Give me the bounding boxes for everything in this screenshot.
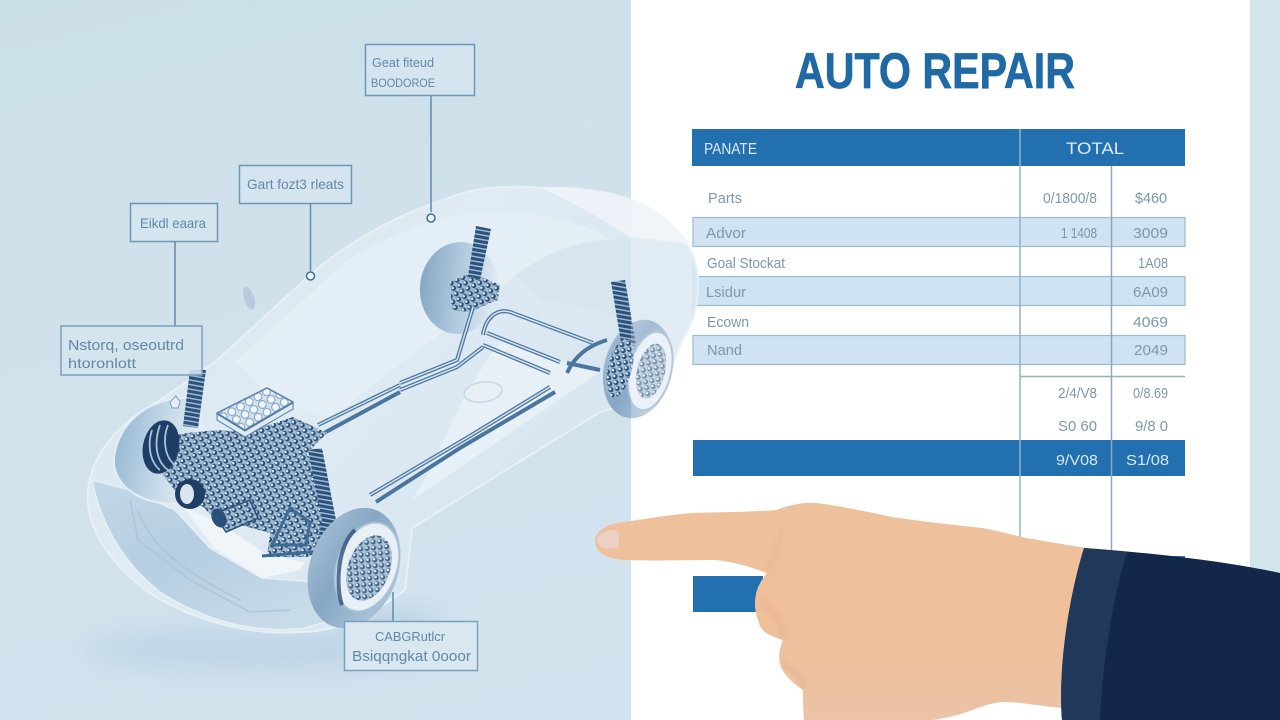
rows text: 6A09 [1133, 284, 1168, 301]
rows text [706, 190, 1168, 435]
callout: top: Geat fiteud [372, 55, 434, 70]
front left brake disc [138, 417, 184, 477]
under-engine highlight [182, 505, 305, 578]
front fender arch [114, 398, 210, 504]
column divider [1110, 166, 1112, 556]
rear right spring [611, 280, 636, 348]
brake mesh [450, 272, 500, 312]
callout: middle [240, 166, 352, 280]
invoice panel [631, 0, 1250, 720]
rows text: $460 [1135, 190, 1167, 207]
rows text: 0/8.69 [1133, 385, 1168, 402]
hand pointing [595, 503, 1280, 720]
fingernail [597, 530, 619, 549]
finger shadow [767, 525, 783, 573]
right coil spring [308, 448, 336, 552]
front bumper [92, 480, 340, 630]
engine block [150, 417, 333, 557]
rear right hub knot [601, 336, 639, 400]
door handle [463, 379, 503, 405]
table header [692, 129, 1185, 166]
summary rule [1020, 376, 1185, 378]
pulley centre [180, 484, 194, 504]
total values: 9/V08 [1056, 452, 1098, 469]
engine cover edge [217, 403, 293, 437]
rear window [515, 239, 691, 330]
rows text: Parts [708, 190, 742, 207]
car shadow [80, 628, 440, 672]
side floor panel [412, 342, 600, 500]
roof panels [235, 212, 612, 420]
engine top cover [217, 388, 293, 430]
callout: top [366, 44, 474, 222]
small bracket [170, 396, 180, 408]
callout: engine: Nstorq, oseoutrd [68, 337, 184, 354]
rows text: Advor [706, 225, 746, 242]
rows text: 1 1408 [1061, 225, 1097, 242]
callout: engine [61, 326, 202, 375]
grand total bar [693, 576, 763, 612]
title: AUTO REPAIR [795, 43, 1075, 99]
car illustration [80, 180, 698, 672]
callout: middle: Gart fozt3 rleats [247, 176, 344, 192]
sleeve [1061, 548, 1280, 720]
table [692, 129, 1185, 612]
rear left spring [468, 226, 491, 280]
lower suspension frame [262, 508, 325, 560]
callout: wheel: Bsiqqngkat 0ooor [352, 648, 471, 665]
callout: left [130, 204, 218, 326]
rows text: 3009 [1133, 225, 1168, 242]
rows text: Goal Stockat [707, 255, 786, 272]
right margin strip [1250, 0, 1280, 720]
total bar [693, 440, 1185, 476]
wheel inner crescent [338, 530, 355, 605]
callout: left: Eikdl eaara [140, 215, 206, 231]
rows text: 4069 [1133, 314, 1168, 331]
rows text: 2049 [1134, 342, 1168, 359]
header label left: PANATE [704, 141, 757, 158]
callout: top: BOODOROE [371, 76, 435, 90]
sleeve cuff [1061, 548, 1127, 720]
header label right: TOTAL [1066, 139, 1124, 158]
bumper details [130, 500, 290, 612]
callout: wheel: CABGRutlcr [375, 629, 446, 644]
rear left wheel [415, 226, 503, 338]
callout: wheel [344, 592, 478, 670]
wheel shadow [345, 611, 445, 639]
rows text: Ecown [707, 314, 749, 331]
total values: S1/08 [1126, 452, 1169, 469]
callout: engine: htoronlott [68, 355, 136, 371]
row band [693, 336, 1185, 364]
rows text: S0 60 [1058, 418, 1097, 435]
brake disc rings [150, 425, 176, 470]
row band [693, 218, 1185, 246]
car body [88, 187, 698, 633]
rows text: 0/1800/8 [1043, 190, 1097, 207]
grand total bar right end [1150, 556, 1185, 568]
row band [693, 276, 1185, 306]
lower pulley [175, 479, 205, 509]
roof highlight [540, 188, 690, 244]
hand shape [595, 503, 1086, 720]
rows text: Lsidur [706, 284, 746, 301]
left coil spring [183, 370, 206, 428]
rows text: 2/4/V8 [1058, 385, 1097, 402]
column divider [1019, 129, 1021, 545]
rows text: 1A08 [1138, 255, 1168, 272]
rows text: Nand [707, 342, 742, 359]
panel wash over car rear [631, 180, 692, 430]
rear right wheel [593, 280, 683, 426]
pipe end [208, 506, 230, 530]
front right wheel [291, 495, 417, 641]
intake pipe [214, 500, 258, 532]
rows text: 9/8 0 [1135, 418, 1168, 435]
knuckle shadow [759, 600, 803, 690]
rear frame rods [318, 307, 607, 502]
side mirror [241, 285, 257, 311]
